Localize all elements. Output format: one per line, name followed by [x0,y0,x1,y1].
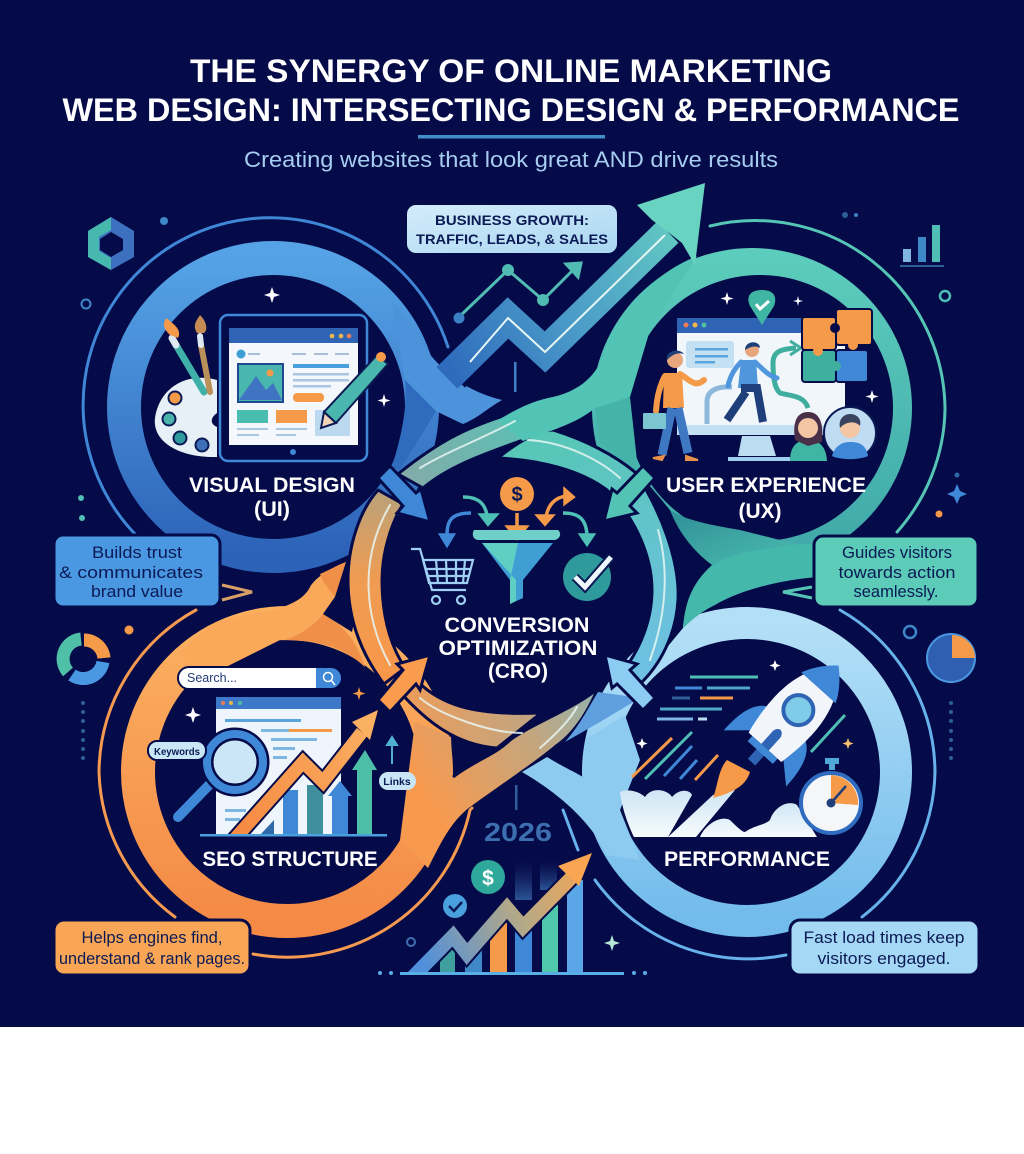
panel: performance illustration [620,637,870,837]
ring: user experience [592,248,912,568]
callout: performance: Fast load times keep [804,928,964,947]
year label: 2026 [484,817,552,847]
icon: path arrows [707,341,808,424]
icon: tablet [220,315,367,461]
icon: location pin [748,290,775,325]
icon: person walking [727,342,777,422]
ribbon: left tan to orange [348,490,405,684]
label: links: Links [383,776,411,788]
label: keywords [148,741,206,760]
callout: business growth [407,205,617,253]
icon: palette [155,378,217,457]
ribbon: right teal to sky [498,430,678,684]
callout: user experience: towards action [838,563,956,582]
ring: visual design [124,258,502,556]
icon: flow arrows [441,490,593,545]
ribbon: teal tail to callout [683,543,820,628]
panel: user experience illustration [643,290,878,461]
icon: dollar bubble: $ [482,867,494,890]
panel: seo illustration [148,667,416,842]
ribbon: bottom tan [400,682,541,748]
callout: seo structure [54,920,250,975]
icon: coin: $ [511,484,523,506]
callout: user experience: Guides visitors [842,543,952,562]
heading: conversion optimization: (CRO) [488,660,548,683]
icon: check [443,894,467,918]
icon: arrow into centre from visual design [378,466,430,522]
callout: seo structure: understand & rank pages. [59,949,245,968]
icon: arrow into centre from seo [378,655,430,712]
icon: pencil [321,352,388,428]
icon: shopping cart [411,549,473,604]
highlights on ribbons [369,421,665,748]
ribbon: teal wedge under ux ring [595,397,638,470]
panel: visual design illustration [155,287,390,461]
subtitle: Creating websites that look great AND drive results [244,147,778,172]
callout: user experience [814,536,978,607]
ribbon: top teal [398,400,570,488]
callout: business growth: TRAFFIC, LEADS, & SALES [416,231,608,247]
heading: conversion optimization [438,614,598,683]
callout: performance: visitors engaged. [818,949,950,968]
icon: stopwatch [801,758,861,833]
icon: speed lines [632,677,845,780]
bars [200,750,387,836]
heading: visual design: (UI) [254,498,290,521]
icon: rocket flame [713,760,750,798]
heading: conversion optimization: CONVERSION [444,614,590,637]
label: links [379,772,416,790]
label: keywords: Keywords [154,746,200,758]
ribbon: teal lower tail [670,510,800,565]
icon: brushes [164,315,210,392]
icon: trend arrow [408,853,592,982]
icon: small up arrow [387,737,397,764]
dark gaps between rings and centre [323,472,712,680]
icon: hexagon [88,217,134,270]
callout: visual design [54,535,220,607]
icon: smoke [620,790,817,837]
big growth arrow [447,183,705,392]
callout: business growth: BUSINESS GROWTH: [435,212,589,228]
icon: results window [216,697,341,835]
icon: small bar chart [900,225,944,267]
icon: search bar: Search... [187,671,237,685]
icon: orange trend arrow [232,710,378,842]
heading: user experience: (UX) [738,500,782,523]
icon: sparkles [720,292,878,403]
icon: sparkles [264,287,390,407]
icon: person with briefcase [643,351,704,460]
ring: performance [522,623,896,921]
conversion ring [348,400,678,748]
icon: puzzle [802,309,872,382]
icon: sparkles [185,707,201,723]
heading: visual design [189,474,355,521]
title: THE SYNERGY OF ONLINE MARKETING [190,53,832,89]
title [62,53,960,128]
icon: funnel [473,530,560,604]
icon: avatars [790,407,876,461]
icon: search bar [178,667,342,689]
icon: arrow into centre from performance [605,655,655,710]
callout: performance [790,920,979,975]
icon: sparkles [636,660,780,749]
panel: conversion icons [411,477,611,604]
bars [400,860,624,975]
callout: visual design: brand value [91,582,183,601]
icon: pie chart [927,634,975,682]
icon: check badge [563,553,611,601]
ribbon: teal tail from user experience [498,256,697,441]
heading: conversion optimization: OPTIMIZATION [438,637,598,660]
thin orbit arcs [83,218,945,959]
icon: monitor [677,318,845,461]
heading: performance: PERFORMANCE [664,848,830,871]
icon: rocket [720,637,870,790]
icon: coin [500,477,534,511]
icon: arrow into centre from ux [604,466,655,521]
panel: lower tails of the rings [670,510,820,628]
callout: seo structure: Helps engines find, [82,928,222,947]
title: WEB DESIGN: INTERSECTING DESIGN & PERFORMANCE [62,92,960,128]
callout: visual design: Builds trust [92,543,182,562]
panel: bottom growth chart [378,785,647,982]
icon: dollar bubble [471,860,505,894]
callout: user experience: seamlessly. [854,582,938,601]
heading: seo structure: SEO STRUCTURE [202,848,378,871]
line chart above arrow [454,263,581,324]
icon: magnifier [178,734,263,817]
decorative dots [78,212,967,760]
ring: seo structure [138,562,436,921]
heading: user experience: USER EXPERIENCE [666,474,866,497]
ribbon: orange tail into centre [400,691,595,868]
heading: visual design: VISUAL DESIGN [189,474,355,497]
heading: user experience [666,474,866,523]
callout: visual design: & communicates [59,563,203,582]
icon: donut chart [63,639,104,679]
